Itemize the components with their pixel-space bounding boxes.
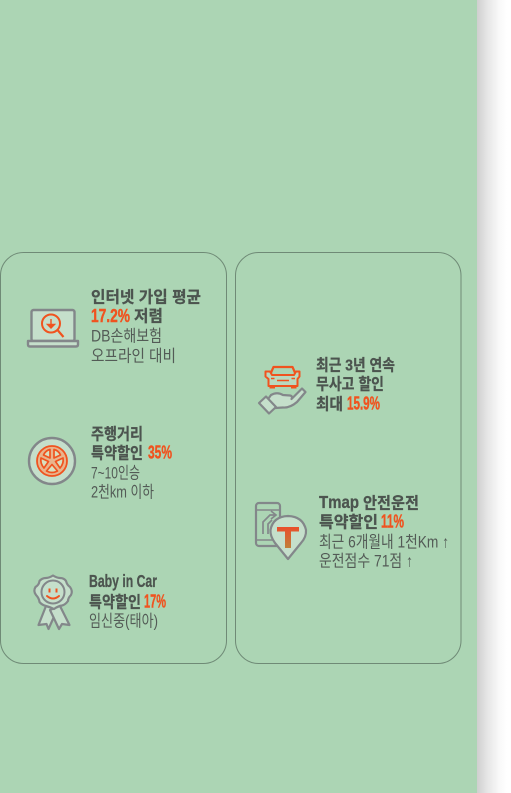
text: no accident discount: 최대 [316,396,343,414]
text: baby in car discount: Baby in Car [89,571,157,591]
icon: car over hand [259,367,306,414]
text: internet discount [91,288,201,366]
text: tmap discount [319,492,449,570]
text: tmap discount: 11% [381,512,404,532]
text: mileage discount: 특약할인 [91,444,143,462]
text: tmap discount: Tmap [319,492,359,512]
text: mileage discount: 35% [148,442,172,462]
icon: phone with T map pin [256,503,306,559]
page edge shadow [477,0,507,793]
text: tmap discount: 특약할인 [319,514,378,532]
text: internet discount: 오프라인 대비 [91,346,176,366]
text: tmap discount: 최근 6개월내 1천Km ↑ [319,532,449,552]
text: no accident discount: 15.9% [347,394,380,414]
text: no accident discount: 무사고 할인 [316,376,384,394]
text: tmap discount: 운전점수 71점 ↑ [319,552,413,570]
text: baby in car discount: 특약할인 [89,594,141,612]
text: internet discount: 인터넷 가입 평균 [91,288,201,306]
text: no accident discount [316,356,395,414]
text: baby in car discount [89,571,166,630]
text: tmap discount: 안전운전 [363,494,419,512]
text: internet discount: 17.2% [91,306,130,326]
text: internet discount: 저렴 [134,308,163,326]
panel: left discounts [0,252,226,664]
text: mileage discount: 2천km 이하 [91,482,154,502]
icon: tire wheel [29,438,75,484]
panel: right discounts [236,252,461,664]
icon: smiling ribbon badge [34,576,72,629]
text: baby in car discount: 임신중(태아) [89,612,158,630]
text: mileage discount [91,424,172,502]
text: internet discount: DB손해보험 [91,326,162,346]
text: mileage discount: 주행거리 [91,424,143,444]
text: baby in car discount: 17% [144,592,166,612]
text: mileage discount: 7~10인승 [91,464,140,482]
icon: laptop with magnifier [28,310,78,346]
text: no accident discount: 최근 3년 연속 [316,356,395,374]
